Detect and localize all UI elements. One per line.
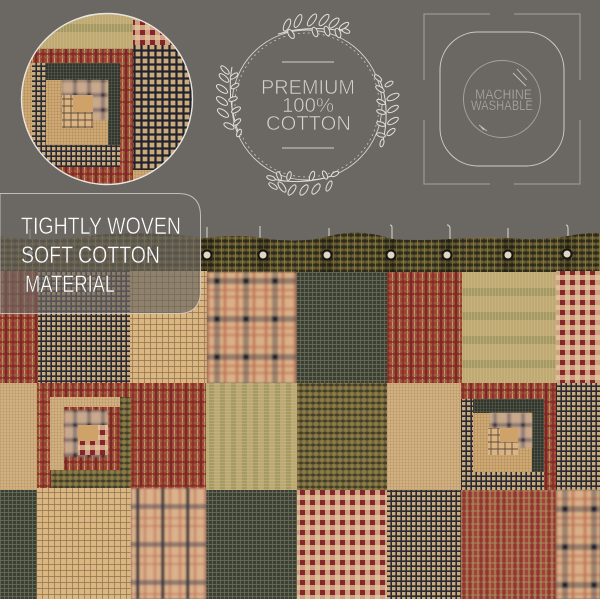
glints [479, 69, 527, 131]
middle row of patches [0, 383, 600, 490]
rule below badge text [282, 147, 334, 149]
badge text: PREMIUM [261, 77, 355, 99]
hanging hooks [30, 225, 568, 240]
laurel branch: left [215, 65, 243, 137]
panel text: SOFT COTTON [21, 242, 160, 269]
corner brackets [424, 14, 580, 184]
laurel branch: bottom [266, 170, 339, 197]
washable text: MACHINE [475, 87, 532, 102]
rule above badge text [282, 61, 334, 63]
inner circle [464, 60, 540, 138]
curtain buttons [26, 249, 572, 260]
badge: premium 100% cotton [215, 13, 400, 197]
badge text: COTTON [266, 113, 351, 135]
badge text [261, 77, 355, 135]
panel text: TIGHTLY WOVEN [21, 213, 181, 240]
curtain valance [0, 230, 600, 275]
laurel branch: top [278, 13, 350, 40]
bottom row of patches [0, 488, 600, 599]
badge: machine washable [424, 14, 580, 184]
rounded square outline [440, 32, 564, 166]
washable text [471, 87, 533, 113]
washable text: WASHABLE [471, 98, 533, 113]
log cabin block: red [37, 383, 131, 490]
callout panel: tightly woven soft cotton material [0, 194, 200, 314]
translucent panel [0, 194, 200, 314]
curtain patchwork [0, 225, 600, 599]
top row of patches [0, 271, 600, 383]
panel text [21, 213, 181, 298]
detail circle: log cabin close-up [20, 10, 195, 190]
badge text: 100% [282, 95, 334, 117]
panel text: MATERIAL [25, 271, 115, 298]
wreath circle [232, 30, 382, 180]
log cabin block: green [461, 383, 556, 491]
laurel branch: right [373, 74, 400, 147]
